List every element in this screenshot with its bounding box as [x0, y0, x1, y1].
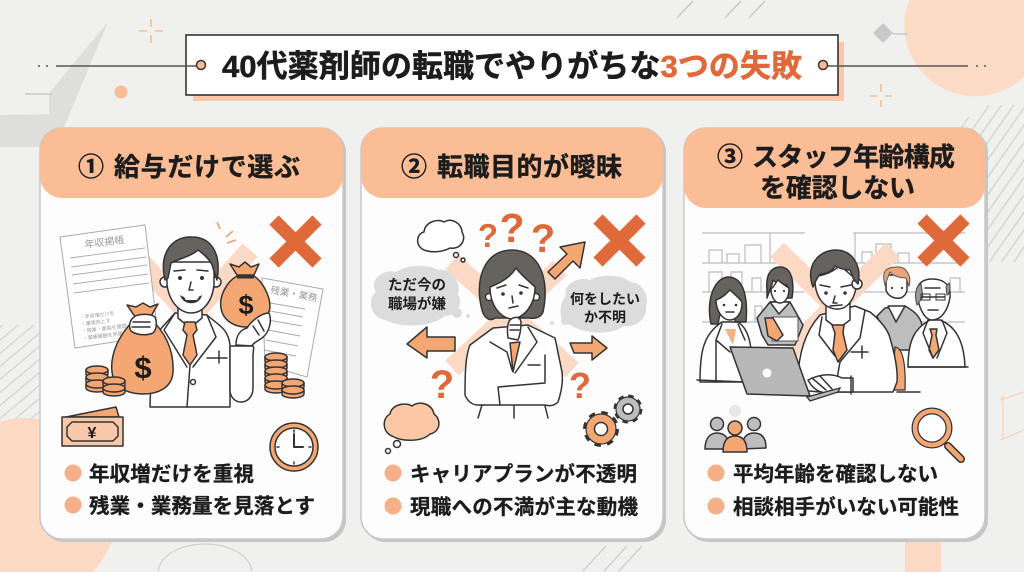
coat — [150, 313, 230, 407]
panel: vague purpose — [361, 128, 666, 542]
laptop — [730, 347, 840, 401]
title text: 40代薬剤師の転職でやりがちな3つの失敗 — [222, 49, 802, 84]
icon: cross — [598, 219, 641, 262]
heading: staff age: を確認しない — [760, 173, 915, 203]
illustration: salary documents and man with money bags — [60, 222, 323, 407]
grey cloud left: 職場が嫌 — [388, 295, 446, 313]
arrow left — [407, 327, 455, 358]
grey cloud left — [371, 266, 470, 326]
pharmacy shelves — [702, 233, 965, 322]
icon: yen banknote — [62, 407, 123, 446]
grey cloud right: 何をしたい — [570, 291, 640, 307]
illustration: salary documents and man with money bags: 残業・業務 — [269, 284, 319, 304]
panel: staff age — [684, 128, 988, 542]
thought cloud bottom — [384, 403, 439, 454]
thought cloud top — [418, 220, 465, 262]
icon: clock — [270, 423, 318, 471]
illustration: salary documents and man with money bags: 年収掲帳 — [84, 233, 125, 251]
illustration: confused woman with question marks: ? — [478, 217, 498, 254]
young man — [877, 267, 922, 350]
heading: staff age: スタッフ年齢構成 — [752, 142, 955, 172]
head — [160, 277, 170, 287]
heading: vague purpose — [361, 128, 663, 198]
illustration: salary documents and man with money bags: $ — [238, 290, 254, 320]
icon: magnifier — [915, 411, 961, 459]
heading: vague purpose: ② — [401, 152, 427, 182]
icon: yen banknote: ¥ — [88, 425, 97, 442]
heading: staff age — [684, 128, 985, 208]
illustration: pharmacy team with laptop — [697, 233, 968, 401]
heading: salary: ① — [78, 152, 104, 182]
illustration: confused woman with question marks: ? — [531, 217, 555, 261]
icon: gears — [586, 397, 640, 444]
bullet list: vague purpose: キャリアプランが不透明 — [410, 462, 637, 486]
woman in scrubs — [757, 267, 803, 345]
illustration: salary documents and man with money bags: $ — [134, 350, 152, 385]
grey cloud left: ただ今の — [388, 276, 446, 294]
older man — [908, 279, 965, 367]
illustration: salary documents and man with money bags: ・残業・面談を確認 — [81, 323, 127, 335]
right hand and sleeve — [236, 313, 270, 346]
illustration: confused woman with question marks — [371, 205, 647, 454]
woman — [465, 250, 562, 418]
icon: cross — [922, 219, 965, 262]
arrow right — [570, 336, 607, 360]
grey cloud right: か不明 — [584, 309, 626, 325]
illustration: salary documents and man with money bags: ・業績報酬を見落す — [82, 330, 128, 342]
main pharmacist — [798, 250, 905, 394]
bullet list: salary: 年収増だけを重視 — [89, 463, 254, 486]
grey cloud right — [550, 276, 647, 333]
title banner — [38, 35, 986, 101]
bullet list: vague purpose — [384, 462, 638, 519]
icon: people group — [705, 405, 766, 452]
illustration: confused woman with question marks: ? — [499, 205, 525, 251]
illustration: salary documents and man with money bags: ・重視向とす — [80, 317, 111, 328]
bullet list: salary — [64, 463, 315, 518]
bullet list: staff age: 相談相手がいない可能性 — [733, 495, 959, 519]
heading: salary: 給与だけで選ぶ — [114, 152, 300, 182]
heading: staff age: ③ — [717, 142, 743, 172]
bullet list: staff age: 平均年齢を確認しない — [733, 463, 938, 486]
woman in coat — [700, 277, 753, 382]
illustration: confused woman with question marks: ? — [430, 363, 454, 407]
panel: salary — [40, 128, 346, 542]
coins — [86, 366, 108, 378]
heading: salary — [40, 128, 343, 198]
icon: cross — [274, 220, 317, 263]
arrow up right — [548, 242, 585, 279]
desk lines — [697, 367, 968, 392]
left money bag — [112, 318, 173, 394]
illustration: salary documents and man with money bags: ・年収増だけを — [79, 310, 115, 321]
bullet list: staff age — [708, 463, 959, 519]
bullet list: salary: 残業・業務量を見落とす — [89, 494, 315, 518]
heading: vague purpose: 転職目的が曖昧 — [437, 152, 622, 182]
bullet list: vague purpose: 現職への不満が主な動機 — [410, 495, 638, 519]
right money bag — [221, 276, 270, 327]
illustration: confused woman with question marks: ? — [569, 365, 591, 406]
